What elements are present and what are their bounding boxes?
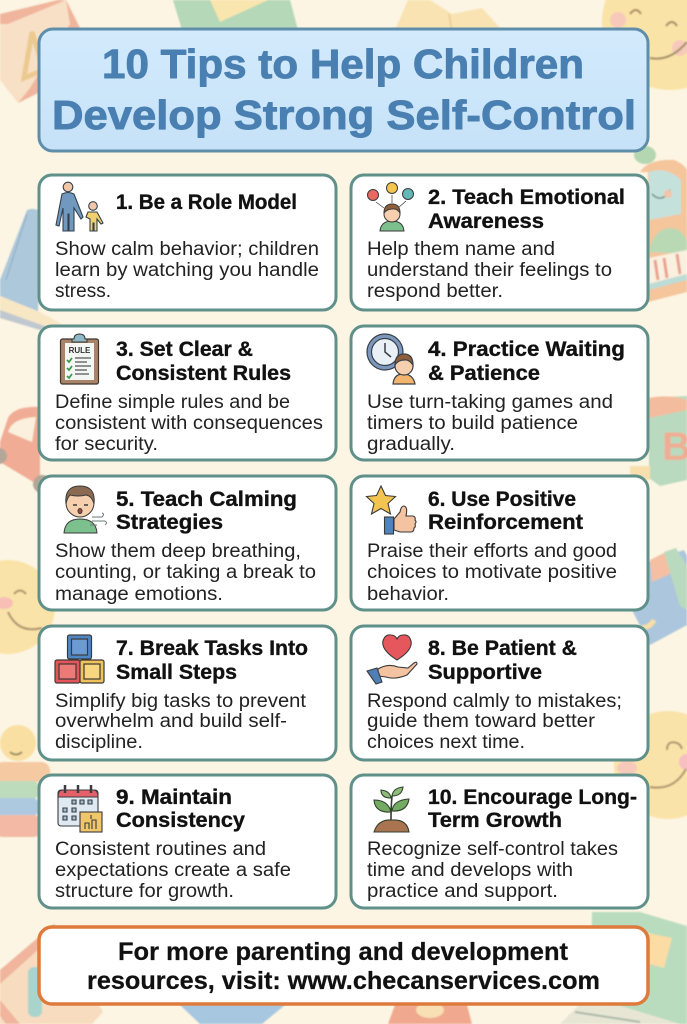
footer callout [39, 927, 648, 1004]
body text [55, 239, 319, 302]
panel: tip 8 [351, 626, 648, 760]
icon: rule clipboard: RULE [69, 346, 91, 355]
body text: stress. [55, 281, 111, 302]
title text: 10 Tips to Help Children [102, 41, 584, 87]
panel: tip 2 [351, 175, 648, 310]
panel: tip 7 [39, 626, 336, 760]
toy: right B block [630, 396, 687, 486]
heading: 4. Practice Waiting [428, 338, 625, 361]
heading: Strategies [116, 511, 223, 534]
body text: Show them deep breathing, [55, 541, 301, 562]
heading [428, 338, 625, 385]
heading [428, 186, 625, 233]
heading [116, 786, 245, 832]
toy: right blue block [632, 548, 687, 645]
body text [367, 541, 617, 605]
body text [55, 691, 307, 753]
heading [428, 786, 637, 832]
body text: Define simple rules and be [55, 392, 290, 413]
body text: Simplify big tasks to prevent [55, 691, 307, 712]
panel: tip 4 [351, 326, 648, 460]
body text: structure for growth. [55, 881, 234, 902]
body text [367, 691, 622, 753]
heading: Reinforcement [428, 511, 583, 534]
body text: gradually. [367, 434, 455, 455]
heading: 1. Be a Role Model [116, 191, 297, 214]
toy: top-right smiley [602, 0, 687, 90]
toy: left red car [0, 407, 51, 493]
body text: consistent with consequences [55, 413, 323, 434]
heading: Supportive [428, 661, 542, 684]
icon: seedling [374, 787, 409, 832]
heading: 6. Use Positive [428, 488, 576, 511]
body text: overwhelm and build self- [55, 711, 287, 732]
body text: understand their feelings to [367, 260, 612, 281]
toy: right smiley [614, 711, 687, 819]
heading: 8. Be Patient & [428, 637, 577, 660]
heading: Consistency [116, 809, 245, 832]
heading: Small Steps [116, 661, 237, 684]
icon: adult and child holding hands [56, 182, 103, 231]
body text: choices to motivate positive [367, 562, 617, 583]
body text [367, 239, 612, 302]
title banner [39, 29, 648, 151]
body text [55, 839, 291, 902]
body text [55, 392, 323, 455]
icon: star and thumbs up [366, 486, 416, 534]
body text [367, 839, 618, 902]
icon: clock and child [367, 334, 415, 384]
panel: tip 3 [39, 326, 336, 460]
toy: left blue book [0, 209, 62, 330]
heading [116, 637, 308, 684]
body text: Consistent routines and [55, 839, 266, 860]
body text: behavior. [367, 584, 449, 605]
toy: bottom centre figures [180, 1002, 472, 1024]
panel: tip 1 [39, 175, 336, 310]
panel: tip 6 [351, 476, 648, 610]
body text: Help them name and [367, 239, 555, 260]
icon: heart over open hand [367, 635, 417, 684]
icon: rule clipboard [60, 334, 98, 384]
toy: right backpack [634, 146, 687, 302]
body text: for security. [55, 434, 158, 455]
body text [367, 392, 613, 455]
footer text: resources, visit: www.checanservices.com [87, 967, 600, 995]
title text [52, 41, 636, 138]
body text: Show calm behavior; children [55, 239, 319, 260]
heading [116, 488, 297, 534]
heading: 7. Break Tasks Into [116, 637, 308, 660]
heading: 9. Maintain [116, 786, 232, 809]
toy: top-left block [0, 0, 80, 103]
heading: 2. Teach Emotional [428, 186, 625, 209]
body text: discipline. [55, 732, 143, 753]
body text: manage emotions. [55, 584, 223, 605]
toy: left smiley [0, 560, 55, 654]
panel: tip 9 [39, 775, 336, 908]
heading [116, 338, 291, 385]
toy: top open book [395, 0, 502, 30]
body text: respond better. [367, 281, 503, 302]
body text: guide them toward better [367, 711, 596, 732]
icon: stacked blocks [55, 635, 104, 683]
heading: 10. Encourage Long- [428, 786, 637, 809]
icon: child with emotion balloons [368, 182, 414, 231]
title text: Develop Strong Self-Control [52, 92, 636, 138]
panel: tip 10 [351, 775, 648, 908]
toy: bottom-left red book [0, 924, 103, 1024]
body text [55, 541, 316, 605]
footer text: For more parenting and development [118, 938, 569, 966]
body text: choices next time. [367, 732, 525, 753]
toy: top green book [173, 0, 298, 30]
heading: Term Growth [428, 809, 562, 832]
toy: left teddy and rings [0, 725, 50, 837]
body text: Use turn-taking games and [367, 392, 613, 413]
body text: time and develops with [367, 860, 573, 881]
icon: child breathing [64, 486, 106, 533]
footer text [87, 938, 600, 995]
body text: counting, or taking a break to [55, 562, 316, 583]
heading [428, 488, 583, 534]
body text: timers to build patience [367, 413, 578, 434]
heading: 5. Teach Calming [116, 488, 297, 511]
toy: bottom-right green book [560, 912, 687, 1024]
icon: calendar [58, 785, 102, 832]
heading: & Patience [428, 362, 540, 385]
heading: 3. Set Clear & [116, 338, 253, 361]
heading [428, 637, 577, 684]
body text: Respond calmly to mistakes; [367, 691, 622, 712]
body text: expectations create a safe [55, 860, 291, 881]
heading: Awareness [428, 210, 544, 233]
panel: tip 5 [39, 476, 336, 610]
body text: learn by watching you handle [55, 260, 319, 281]
body text: Praise their efforts and good [367, 541, 617, 562]
heading: Consistent Rules [116, 362, 291, 385]
body text: Recognize self-control takes [367, 839, 618, 860]
body text: practice and support. [367, 881, 558, 902]
